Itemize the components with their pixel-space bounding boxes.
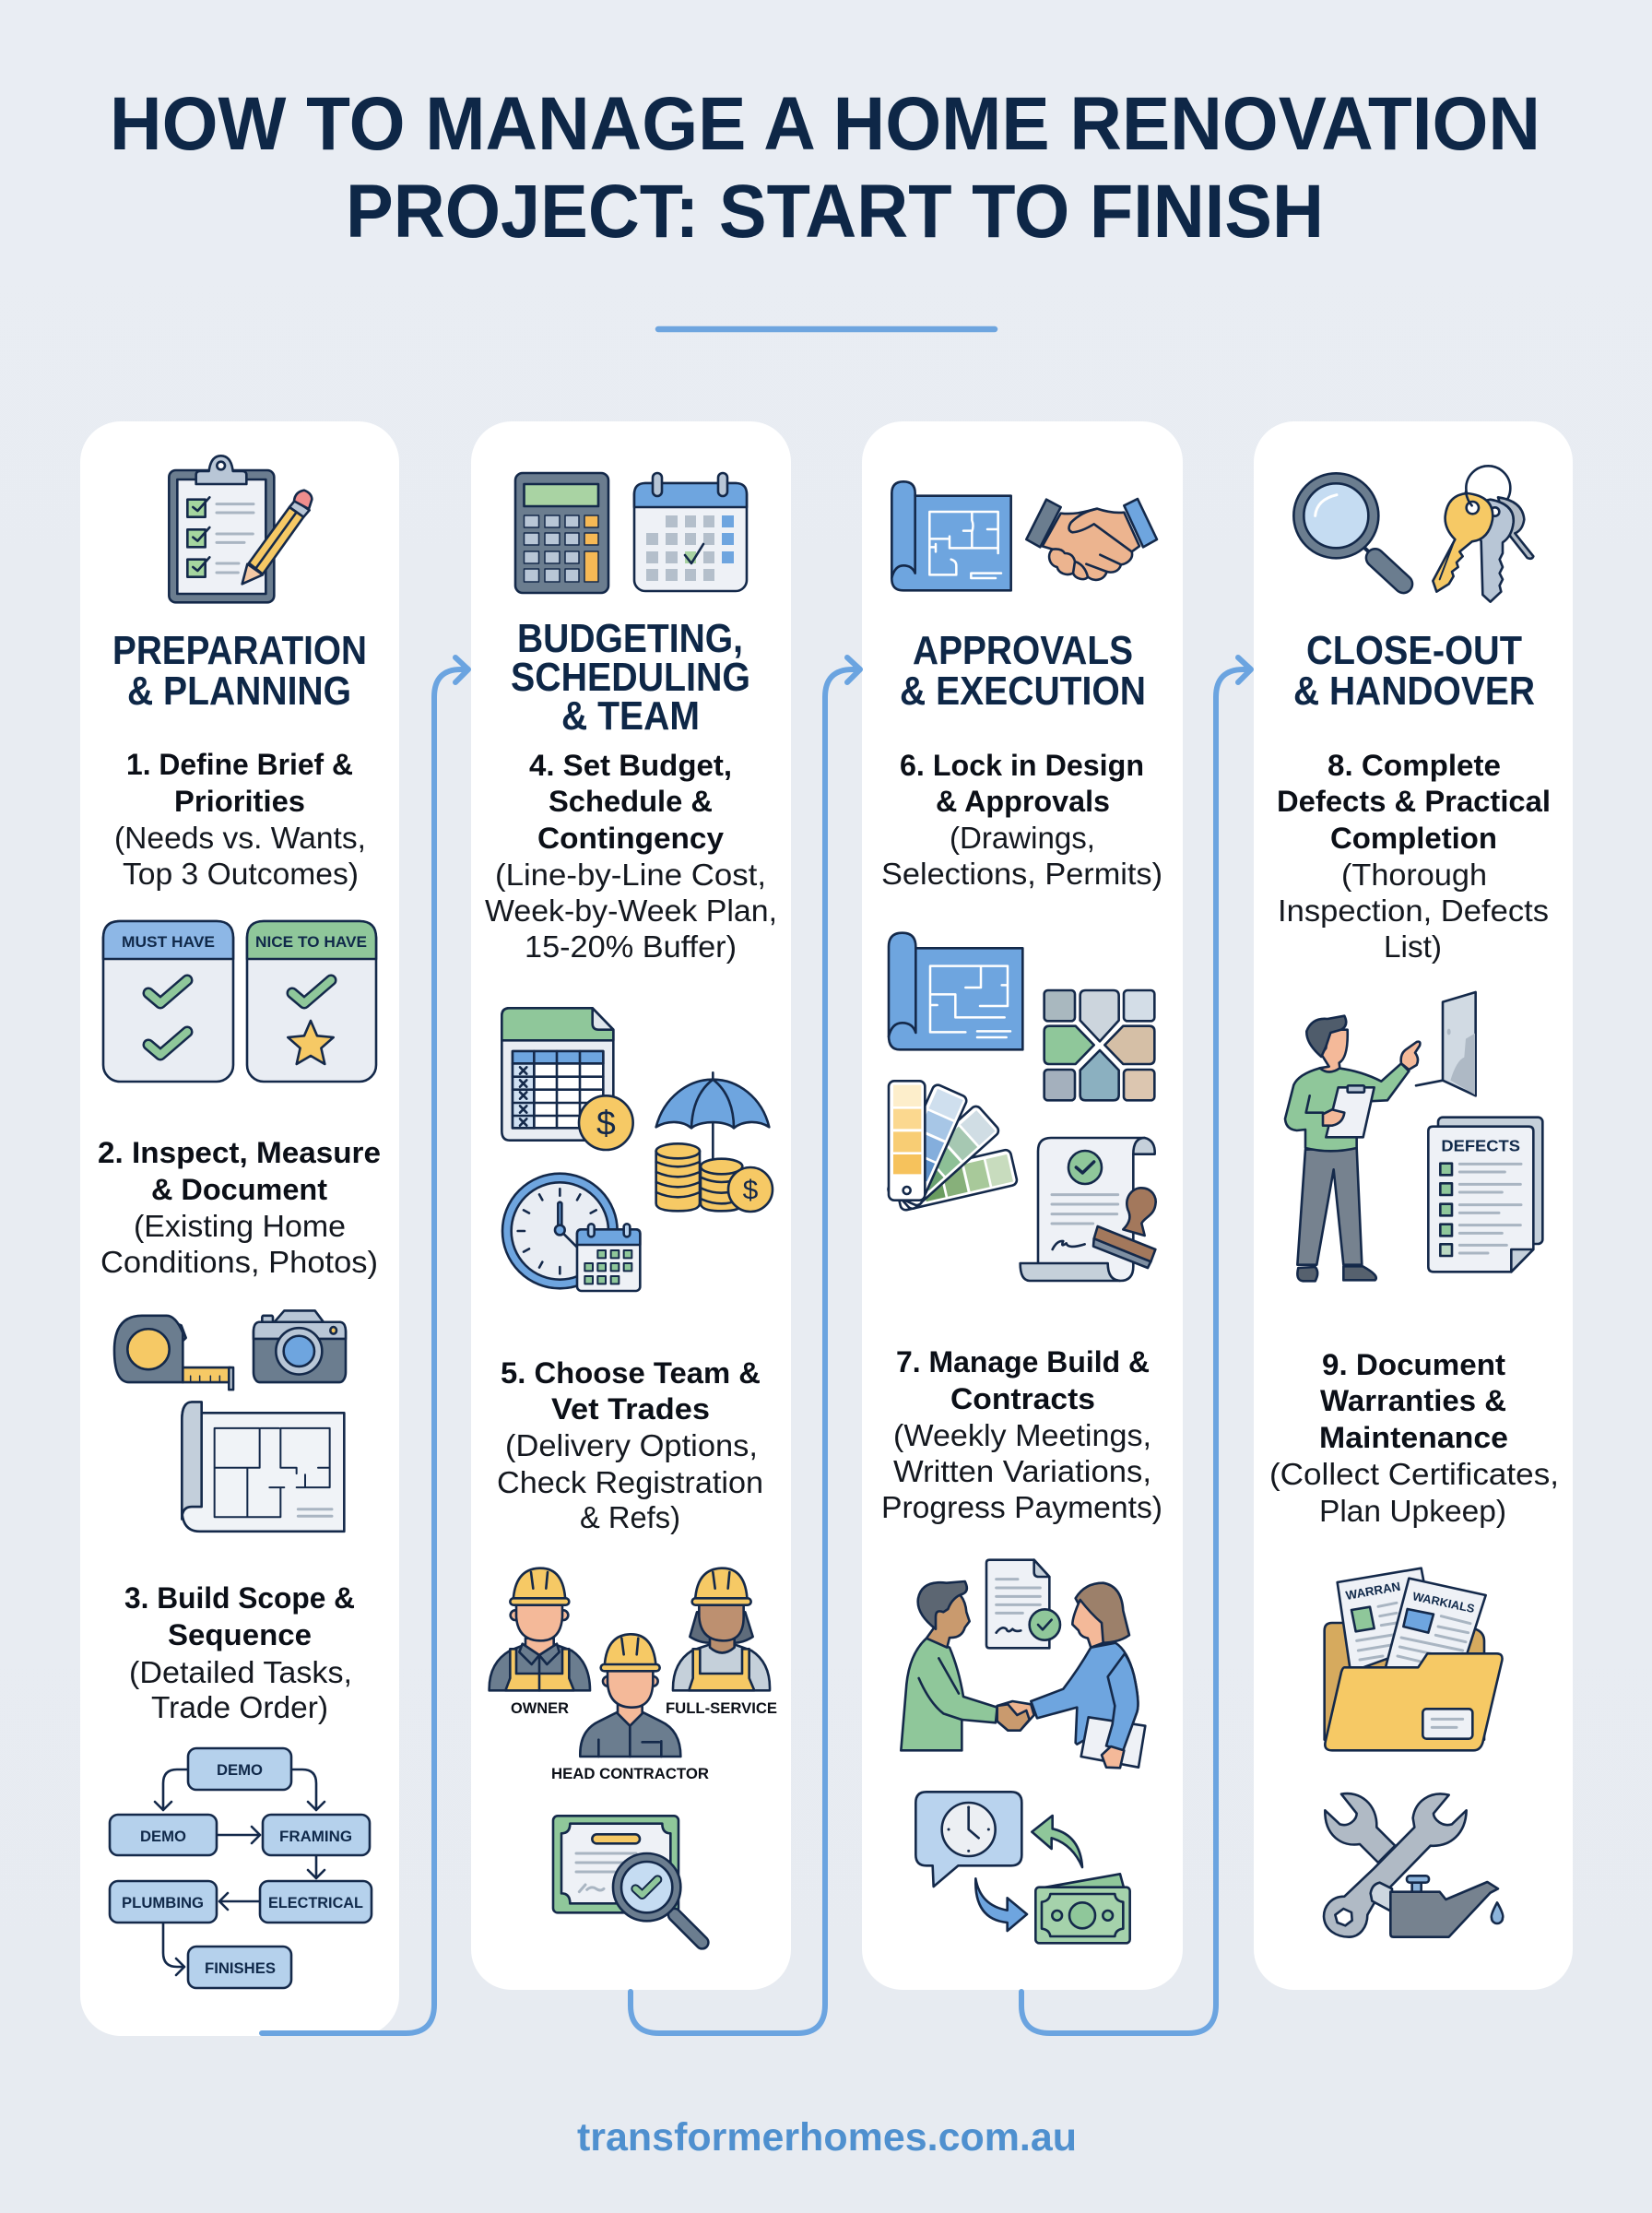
heading: approvals and execution: APPROVALS — [913, 628, 1133, 673]
icon: calendar — [634, 473, 747, 591]
flowchart: trade sequence: PLUMBING — [122, 1894, 204, 1911]
step 3 text: Sequence — [168, 1618, 312, 1651]
step 8 text: Defects & Practical — [1277, 785, 1551, 818]
step 6 text — [881, 749, 1162, 891]
step 7 text: Progress Payments) — [881, 1490, 1162, 1524]
icon: warranty folder and maintenance tools: WARKIALS — [1411, 1590, 1476, 1615]
flowchart: trade sequence: DEMO — [217, 1761, 263, 1779]
team labels: FULL-SERVICE — [666, 1699, 777, 1717]
flowchart: trade sequence — [110, 1748, 372, 1988]
footer website: transformerhomes.com.au — [577, 2115, 1077, 2160]
icon: calculator — [515, 473, 608, 593]
step 5 text — [497, 1356, 763, 1534]
heading: preparation and planning: & PLANNING — [127, 669, 351, 714]
step 9 text: 9. Document — [1322, 1348, 1505, 1381]
icon: clipboard and pencil — [169, 456, 312, 602]
flowchart: trade sequence: DEMO — [140, 1828, 186, 1845]
icon: budget sheet, contingency umbrella, schedule clock — [502, 1008, 773, 1291]
icon: contract handshake and payment cycle — [901, 1560, 1145, 1943]
step 2 text: (Existing Home — [134, 1209, 346, 1243]
step 2 text — [98, 1136, 381, 1279]
team labels — [511, 1699, 777, 1782]
title: PROJECT: START TO FINISH — [346, 170, 1324, 254]
step 4 text: 15-20% Buffer) — [525, 929, 737, 964]
icon: warranty folder and maintenance tools: WARRAN — [1345, 1580, 1401, 1603]
icon: budget sheet, contingency umbrella, schedule clock: $ — [743, 1176, 759, 1206]
icon: warranty folder and maintenance tools — [1324, 1568, 1503, 1937]
heading: preparation and planning — [112, 628, 367, 714]
icon: team of three workers and vetting certificate — [490, 1568, 770, 1943]
step 1 text: Priorities — [174, 785, 305, 818]
step 1 text: Top 3 Outcomes) — [123, 857, 359, 891]
heading: budgeting, scheduling and team: & TEAM — [561, 693, 700, 739]
step 7 text — [881, 1345, 1162, 1524]
arrow: connector from panel 3 to panel 4 — [1021, 657, 1251, 2033]
nice to have panel — [247, 921, 376, 1082]
step 2 text: Conditions, Photos) — [100, 1245, 378, 1279]
step 3 text — [124, 1581, 355, 1724]
heading: preparation and planning: PREPARATION — [112, 628, 367, 673]
step 8 text: Completion — [1330, 822, 1497, 855]
heading: budgeting, scheduling and team: BUDGETING, — [517, 616, 743, 661]
step 6 text: 6. Lock in Design — [900, 749, 1144, 782]
step 1 text: (Needs vs. Wants, — [114, 821, 366, 855]
step 9 text — [1269, 1348, 1559, 1528]
step 1 text: 1. Define Brief & — [126, 748, 353, 781]
step 9 text: (Collect Certificates, — [1269, 1457, 1559, 1491]
title — [110, 82, 1540, 254]
step 7 text: (Weekly Meetings, — [893, 1418, 1151, 1452]
icon: keys — [1433, 466, 1533, 602]
icon: inspector pointing at wall and defects list — [1285, 992, 1542, 1281]
step 8 text: 8. Complete — [1328, 749, 1501, 782]
step 3 text: Trade Order) — [151, 1690, 328, 1724]
heading: close-out and handover: CLOSE-OUT — [1306, 628, 1522, 673]
step 6 text: & Approvals — [936, 785, 1110, 818]
step 5 text: Check Registration — [497, 1465, 763, 1499]
arrow: connector from panel 2 to panel 3 — [631, 657, 860, 2033]
step 4 text — [485, 749, 777, 964]
step 4 text: (Line-by-Line Cost, — [495, 858, 766, 892]
heading: approvals and execution: & EXECUTION — [900, 669, 1146, 714]
must have panel: MUST HAVE — [122, 933, 215, 951]
team labels: OWNER — [511, 1699, 569, 1717]
card background 1 — [80, 421, 399, 2036]
step 3 text: 3. Build Scope & — [124, 1581, 355, 1615]
step 6 text: (Drawings, — [950, 821, 1095, 855]
step 9 text: Maintenance — [1319, 1421, 1508, 1454]
step 4 text: Schedule & — [549, 785, 713, 818]
icon: inspector pointing at wall and defects list: DEFECTS — [1441, 1136, 1520, 1154]
icon: budget sheet, contingency umbrella, schedule clock: $ — [596, 1104, 616, 1142]
arrow: connector from panel 1 to panel 2 — [262, 657, 468, 2033]
step 5 text: (Delivery Options, — [505, 1428, 758, 1462]
step 3 text: (Detailed Tasks, — [129, 1655, 352, 1689]
icon: plans, tiles, swatches and stamped permit — [887, 933, 1156, 1281]
panel: approvals and execution — [862, 421, 1183, 1990]
step 4 text: 4. Set Budget, — [529, 749, 732, 782]
heading: close-out and handover — [1293, 628, 1535, 714]
panel: preparation and planning — [80, 421, 399, 2036]
step 7 text: Contracts — [950, 1382, 1095, 1415]
step 7 text: Written Variations, — [893, 1454, 1151, 1488]
heading: budgeting, scheduling and team: SCHEDULING — [511, 655, 750, 700]
step 5 text: & Refs) — [580, 1500, 680, 1534]
card background 4 — [1254, 421, 1573, 1990]
flowchart: trade sequence: ELECTRICAL — [268, 1894, 363, 1911]
step 5 text: 5. Choose Team & — [501, 1356, 761, 1390]
step 8 text: List) — [1384, 929, 1442, 964]
step 8 text: Inspection, Defects — [1278, 893, 1549, 928]
step 8 text: (Thorough — [1341, 858, 1487, 892]
flowchart: trade sequence: FRAMING — [279, 1828, 352, 1845]
icon: tape measure, camera and floor plan — [114, 1310, 346, 1532]
step 2 text: & Document — [151, 1173, 327, 1206]
icon: magnifying glass — [1293, 473, 1403, 584]
nice to have panel: NICE TO HAVE — [255, 933, 367, 951]
step 9 text: Plan Upkeep) — [1319, 1494, 1506, 1528]
panel: close-out and handover — [1254, 421, 1573, 1990]
icon: handshake — [1026, 499, 1157, 580]
step 2 text: 2. Inspect, Measure — [98, 1136, 381, 1169]
card background 3 — [862, 421, 1183, 1990]
step 9 text: Warranties & — [1320, 1384, 1506, 1417]
icon: blueprint — [891, 481, 1011, 590]
flowchart: trade sequence: FINISHES — [205, 1959, 276, 1977]
heading: budgeting, scheduling and team — [511, 616, 750, 739]
step 4 text: Contingency — [537, 822, 724, 855]
title underline — [658, 326, 995, 332]
step 7 text: 7. Manage Build & — [896, 1345, 1150, 1379]
card background 2 — [471, 421, 791, 1990]
panel: budgeting, scheduling and team — [471, 421, 791, 1990]
step 4 text: Week-by-Week Plan, — [485, 893, 777, 928]
step 1 text — [114, 748, 366, 891]
step 5 text: Vet Trades — [551, 1392, 710, 1426]
step 8 text — [1277, 749, 1551, 964]
must have panel — [103, 921, 233, 1082]
title: HOW TO MANAGE A HOME RENOVATION — [110, 82, 1540, 166]
heading: approvals and execution — [900, 628, 1146, 714]
team labels: HEAD CONTRACTOR — [551, 1765, 709, 1782]
heading: close-out and handover: & HANDOVER — [1293, 669, 1535, 714]
step 6 text: Selections, Permits) — [881, 857, 1162, 891]
